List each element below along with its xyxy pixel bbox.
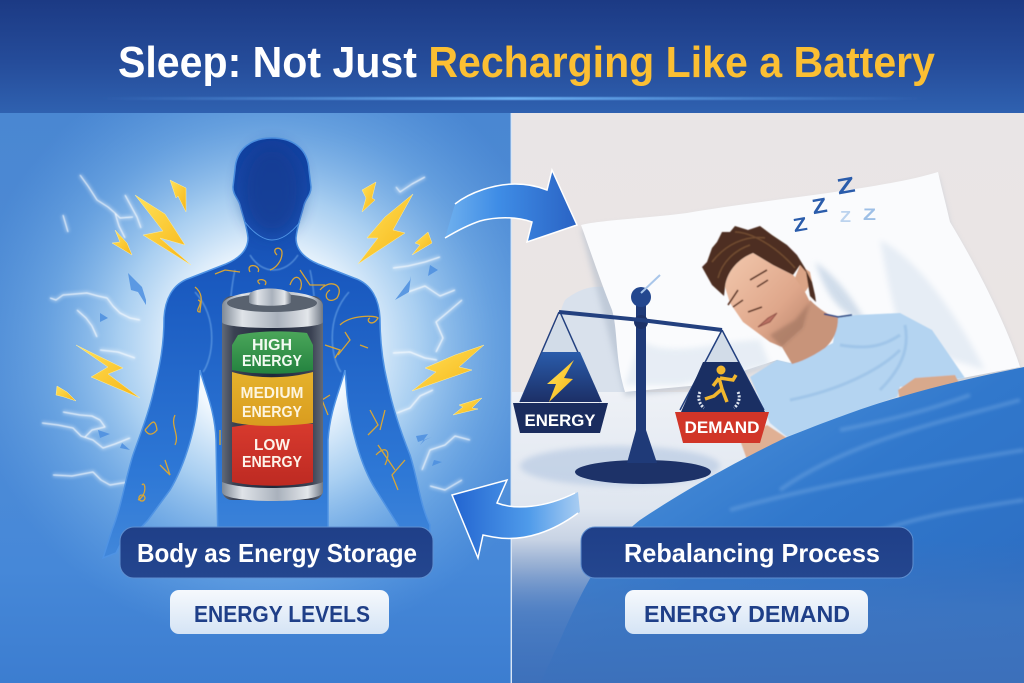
balance scale	[513, 275, 769, 484]
ear	[795, 265, 812, 292]
icon: energy bolt	[547, 360, 574, 402]
neck	[782, 300, 838, 364]
tag: energy demand: ENERGY DEMAND	[644, 601, 850, 627]
label: body as energy storage	[120, 527, 433, 578]
sleep Z letters: Z	[835, 172, 857, 199]
small blue bolts	[98, 265, 442, 466]
sleep Z letters	[792, 172, 876, 237]
level: medium energy: MEDIUM	[240, 385, 304, 402]
sleep Z letters: Z	[840, 209, 851, 226]
level: medium energy: ENERGY	[242, 404, 303, 421]
level: high energy	[232, 331, 313, 374]
icon: runner	[705, 366, 736, 402]
level: high energy: HIGH	[252, 337, 292, 354]
label: rebalancing process: Rebalancing Process	[624, 538, 880, 568]
level: high energy: ENERGY	[242, 353, 303, 370]
level: low energy: LOW	[254, 437, 291, 454]
battery terminal	[249, 288, 291, 306]
back pillow	[559, 287, 640, 392]
arrow: top clockwise	[445, 170, 577, 242]
sleep Z letters: Z	[863, 205, 876, 224]
battery	[222, 288, 323, 501]
sleeping man	[702, 226, 965, 468]
pan: demand: DEMAND	[684, 419, 760, 437]
arrow: bottom clockwise	[452, 480, 580, 558]
sleep Z letters: Z	[810, 194, 829, 219]
energy veins	[138, 248, 405, 501]
t-shirt	[750, 313, 965, 437]
label: body as energy storage: Body as Energy Storage	[137, 538, 417, 568]
panel: left body background	[0, 112, 511, 683]
blanket	[512, 367, 1024, 683]
bare arm	[898, 375, 960, 400]
lightning bolts	[56, 180, 484, 415]
sleep Z letters: Z	[792, 214, 809, 237]
level: low energy	[232, 423, 313, 486]
human silhouette	[103, 138, 430, 558]
lower arm	[740, 425, 790, 468]
scale beam	[559, 312, 722, 330]
scale base and post	[575, 275, 711, 484]
tag: energy levels	[170, 590, 389, 634]
pan: energy	[513, 312, 608, 433]
tag: energy demand	[625, 590, 868, 634]
pan: demand	[675, 330, 769, 443]
pan: energy: ENERGY	[524, 412, 596, 430]
panel: right sleep background	[511, 112, 1024, 683]
header band	[0, 0, 1024, 113]
bed surface	[512, 392, 812, 683]
laurels	[699, 392, 739, 408]
hair	[702, 226, 816, 302]
label: rebalancing process	[581, 527, 913, 578]
title: Sleep: Not Just Recharging Like a Battery	[118, 38, 935, 87]
closed eyes and mouth	[728, 270, 768, 312]
tag: energy levels: ENERGY LEVELS	[194, 601, 370, 627]
level: medium energy	[232, 372, 313, 426]
face	[725, 253, 810, 347]
main pillow	[581, 172, 1020, 396]
electric cracks	[42, 175, 470, 490]
level: low energy: ENERGY	[242, 454, 303, 471]
